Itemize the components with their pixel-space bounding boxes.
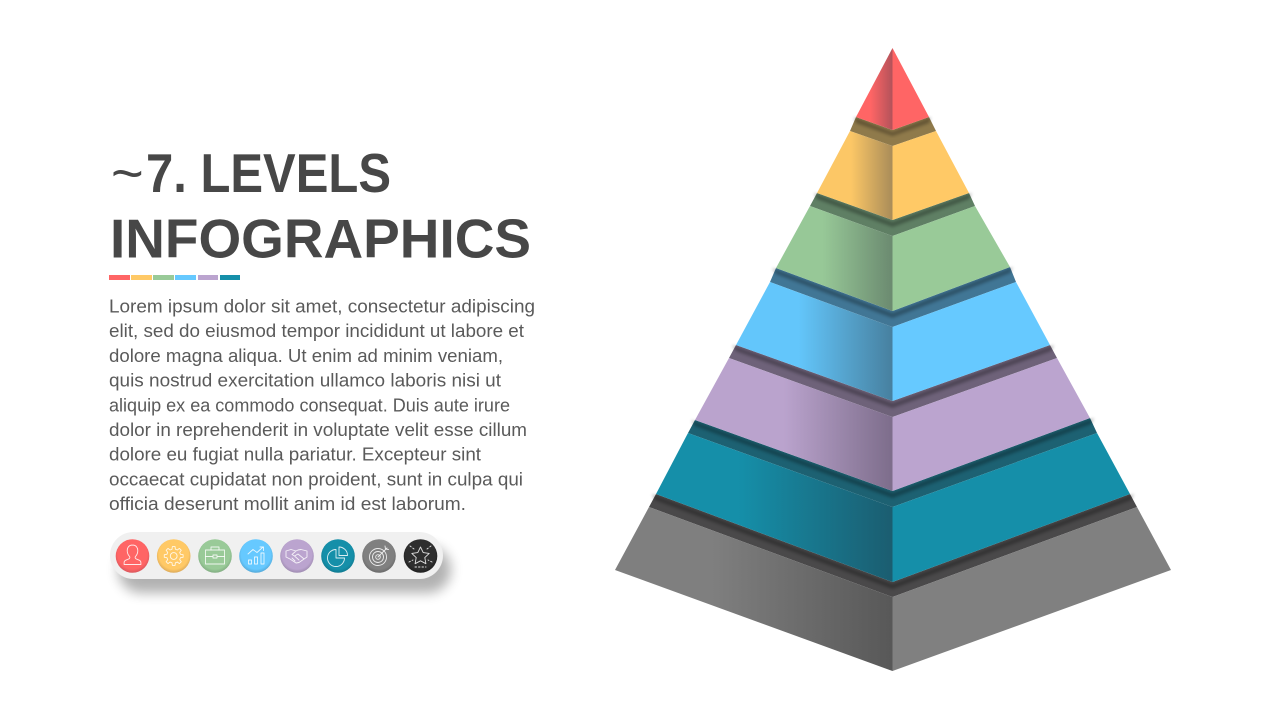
- title: INFOGRAPHICS: [110, 208, 531, 270]
- level 7: grey base: [615, 494, 1171, 671]
- icon: pie chart: [321, 539, 355, 573]
- title: [110, 141, 531, 270]
- body text: elit, sed do eiusmod tempor incididunt ut labore et: [109, 320, 524, 341]
- body text: [109, 296, 535, 514]
- title: ~: [111, 141, 144, 204]
- body text: dolor in reprehenderit in voluptate velit esse cillum: [109, 419, 527, 440]
- icon strip: [110, 532, 451, 593]
- level 5: purple: [691, 345, 1094, 498]
- pyramid: [615, 48, 1171, 671]
- level 2: yellow: [814, 117, 972, 227]
- icon: target: [362, 539, 396, 573]
- level 4: blue: [732, 267, 1054, 408]
- body text: aliquip ex ea commodo consequat. Duis aute irure: [109, 394, 510, 415]
- level 3: green: [772, 193, 1013, 318]
- title: 7. LEVELS: [146, 142, 391, 204]
- icon: handshake: [280, 539, 314, 573]
- body text: dolore eu fugiat nulla pariatur. Excepteur sint: [109, 444, 481, 465]
- level 6: teal: [652, 418, 1134, 589]
- icon: gear: [157, 539, 190, 573]
- body text: Lorem ipsum dolor sit amet, consectetur adipiscing: [109, 296, 535, 316]
- body text: occaecat cupidatat non proident, sunt in culpa qui: [109, 468, 523, 489]
- level 1: red apex: [854, 48, 931, 136]
- body text: dolore magna aliqua. Ut enim ad minim veniam,: [109, 345, 503, 366]
- body text: quis nostrud exercitation ullamco laboris nisi ut: [109, 370, 501, 391]
- icon: person: [116, 539, 149, 573]
- icon: briefcase: [198, 539, 232, 573]
- body text: officia deserunt mollit anim id est laborum.: [109, 493, 466, 514]
- icon: growth chart: [239, 539, 273, 573]
- colour bar under title: [109, 275, 240, 280]
- icon: star: [404, 539, 437, 573]
